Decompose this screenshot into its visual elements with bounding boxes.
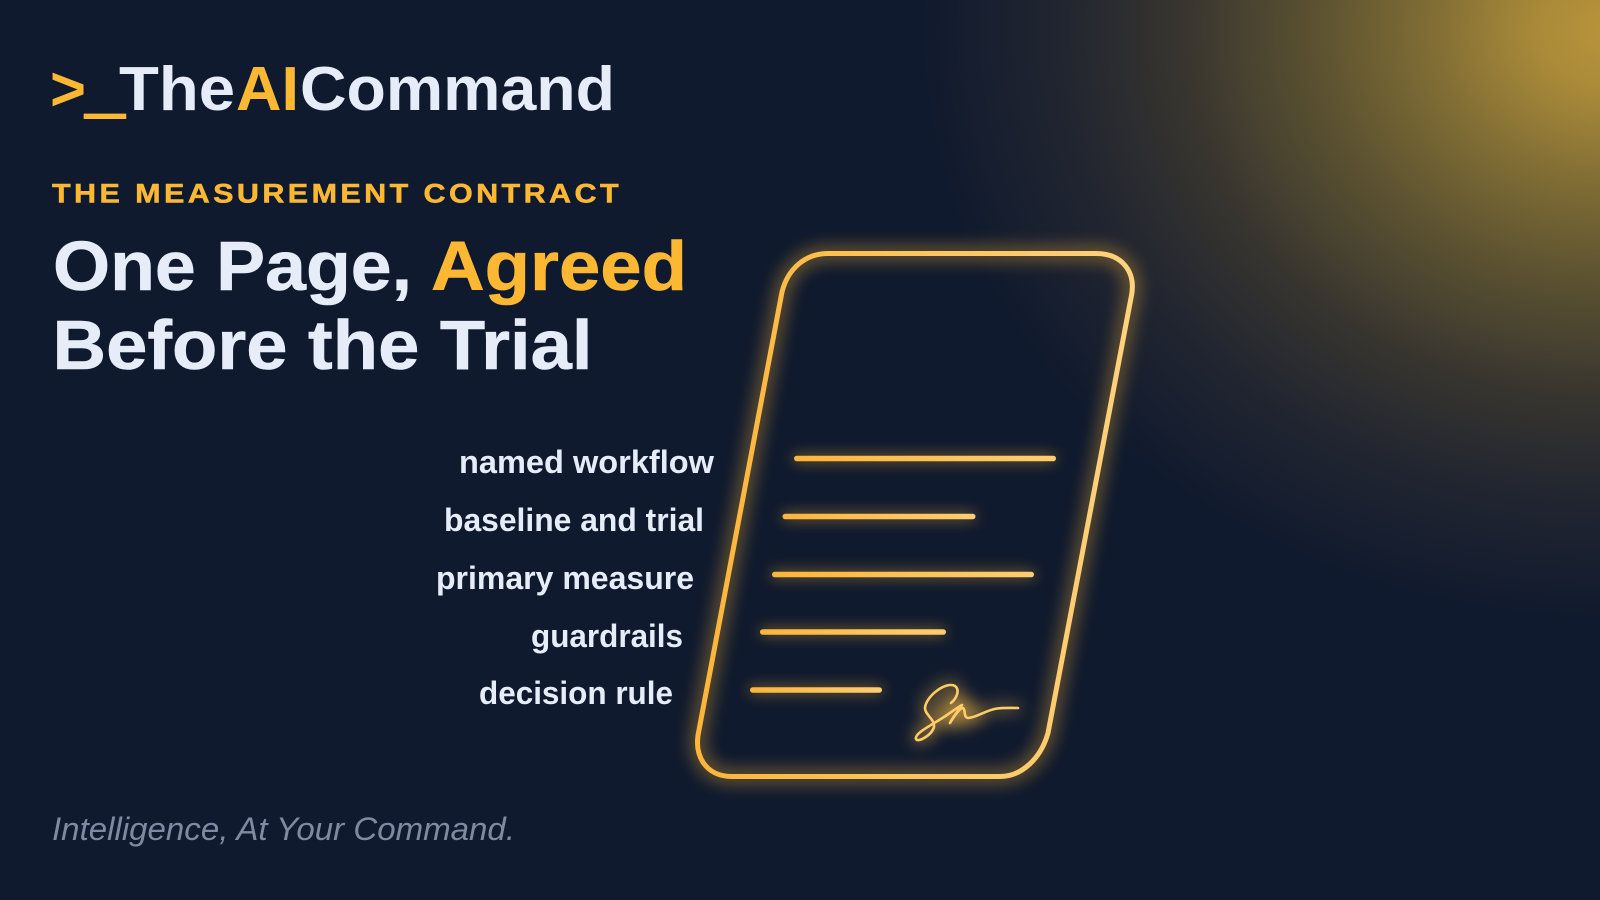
checklist labels <box>436 444 714 711</box>
headline: Agreed <box>431 227 687 305</box>
logo: AI <box>236 55 299 124</box>
checklist labels: named workflow <box>459 444 714 480</box>
tagline: Intelligence, At Your Command. <box>52 811 515 847</box>
checklist labels: decision rule <box>479 675 673 711</box>
logo: Command <box>300 55 615 124</box>
document outline <box>698 254 1132 776</box>
headline <box>52 227 687 384</box>
eyebrow: THE MEASUREMENT CONTRACT <box>52 178 622 208</box>
checklist labels: baseline and trial <box>444 502 704 538</box>
logo prompt underscore: _ <box>85 55 126 124</box>
logo <box>50 55 615 124</box>
document text lines <box>750 456 1056 693</box>
checklist labels: guardrails <box>531 618 683 654</box>
signature <box>916 685 1018 740</box>
document icon <box>698 254 1132 776</box>
logo: The <box>119 55 235 124</box>
logo prompt chevron: > <box>50 55 86 124</box>
headline: One Page, <box>53 227 412 305</box>
checklist labels: primary measure <box>436 560 694 596</box>
headline: Before the Trial <box>52 306 592 384</box>
